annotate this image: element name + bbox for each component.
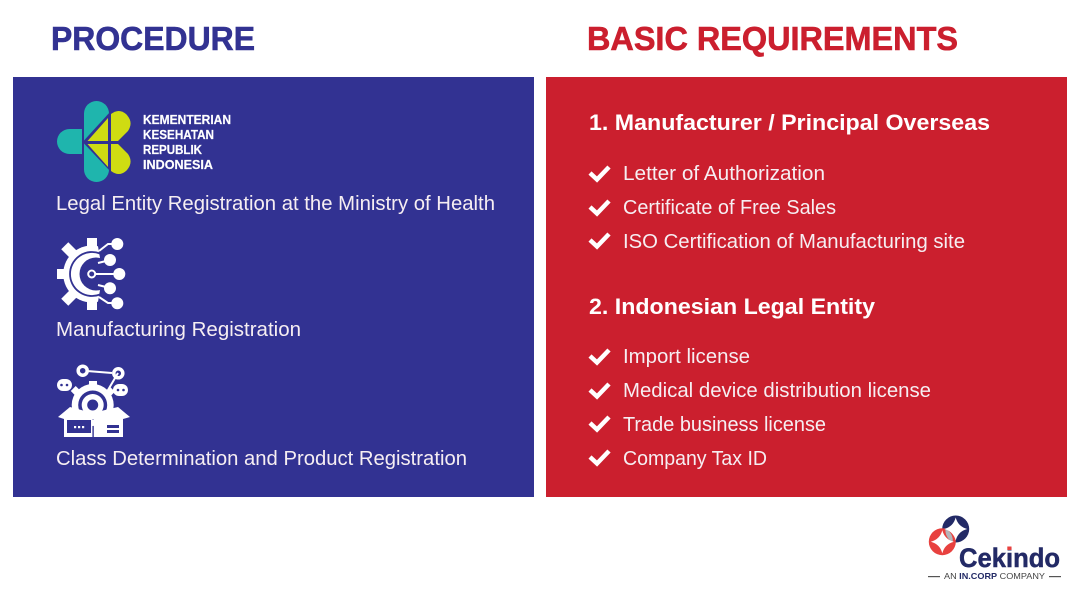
icon: ministry of health logo: REPUBLIK	[143, 142, 203, 157]
label: class determination: Class Determination and Product Registration	[56, 448, 467, 470]
logo: cekindo: Cekindo	[959, 543, 1060, 573]
subheading: indonesian legal entity: 2. Indonesian Legal Entity	[589, 294, 876, 319]
item: medical device distribution license: Medical device distribution license	[623, 380, 931, 402]
logo: cekindo: AN IN.CORP COMPANY	[944, 571, 1045, 581]
label: legal entity registration: Legal Entity Registration at the Ministry of Health	[56, 193, 495, 215]
heading: procedure: PROCEDURE	[51, 20, 255, 57]
item: letter of authorization: Letter of Authorization	[623, 163, 825, 185]
icon: open box with gear	[57, 366, 130, 437]
logo: cekindo	[928, 516, 1061, 581]
item: import license: Import license	[623, 346, 750, 368]
icon: gear with network nodes	[57, 238, 125, 310]
panel: basic requirements	[546, 77, 1067, 497]
item: certificate of free sales: Certificate of Free Sales	[623, 197, 836, 219]
icon: ministry of health logo	[57, 101, 231, 182]
item: company tax id: Company Tax ID	[623, 448, 767, 470]
icon: ministry of health logo: KEMENTERIAN	[143, 112, 231, 127]
heading: basic requirements: BASIC REQUIREMENTS	[587, 20, 958, 57]
icon: ministry of health logo: KESEHATAN	[143, 127, 214, 142]
item: iso certification: ISO Certification of Manufacturing site	[623, 231, 965, 253]
subheading: manufacturer: 1. Manufacturer / Principal Overseas	[589, 110, 990, 135]
item: trade business license: Trade business license	[623, 414, 826, 436]
icon: ministry of health logo: INDONESIA	[143, 157, 214, 172]
panel: procedure	[13, 77, 534, 497]
label: manufacturing registration: Manufacturing Registration	[56, 319, 301, 341]
